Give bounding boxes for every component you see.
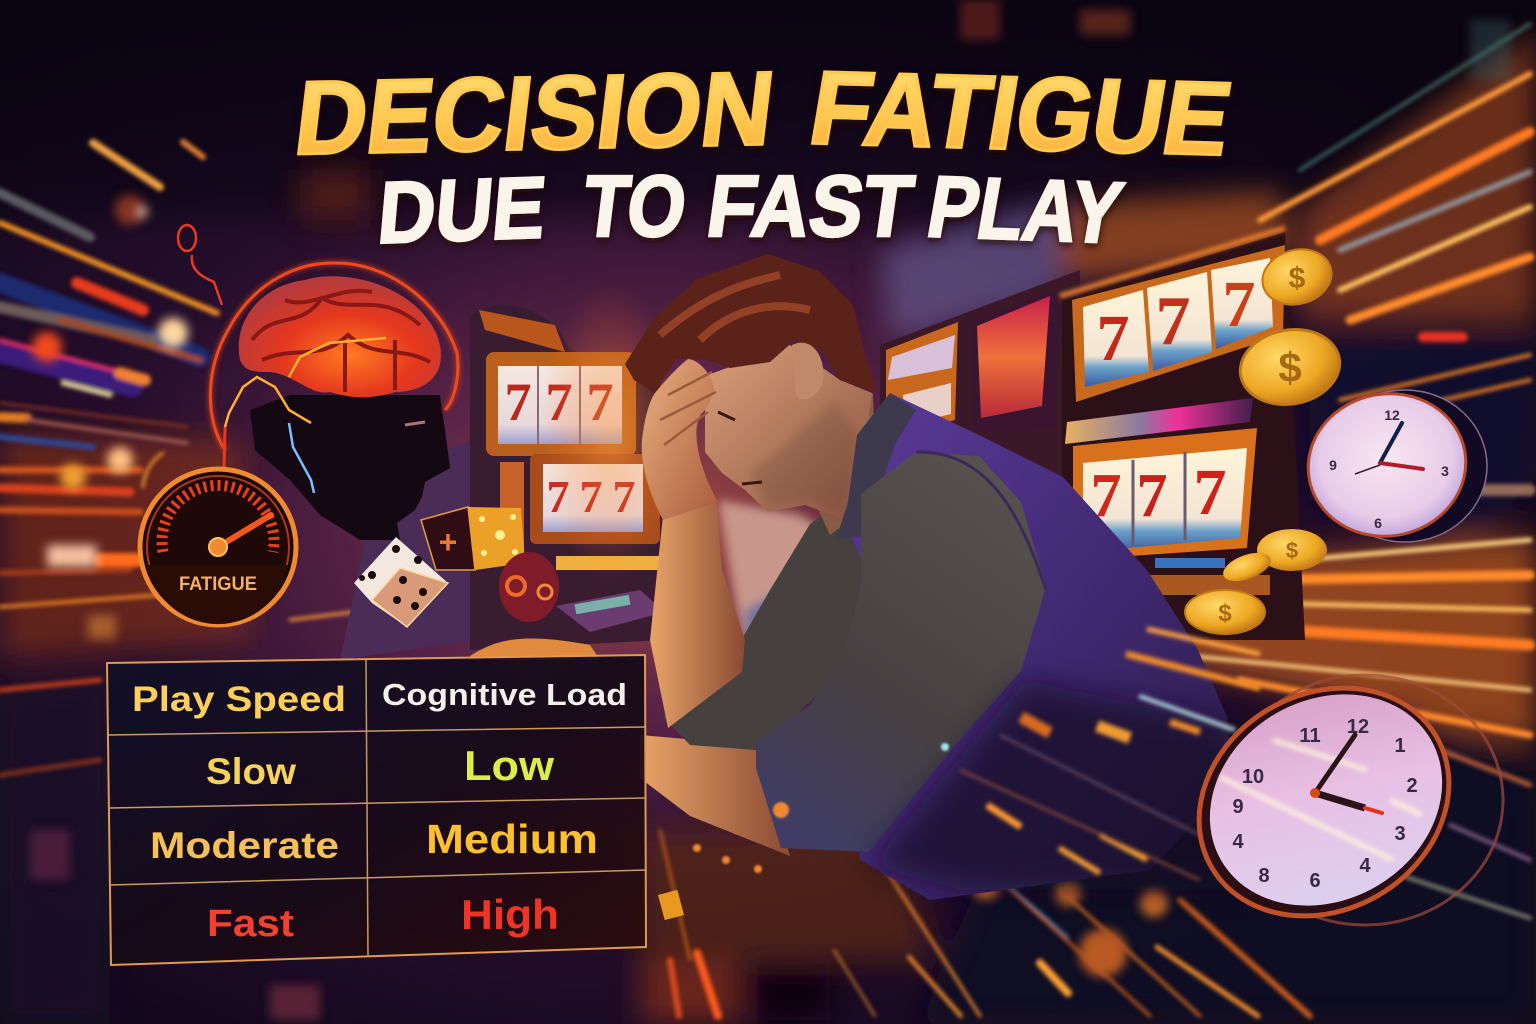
far slot machine [880,270,1080,560]
stubble shading [750,400,860,515]
row: fast: Fast [207,903,294,945]
orange die [421,507,475,570]
streaks over lower torso [693,629,1260,890]
white die [354,537,448,627]
table header: Play Speed [132,680,346,719]
coins [1185,242,1346,634]
coins: $ [1286,538,1298,563]
lower clock: 4 [1359,855,1371,877]
lower clock [1157,643,1503,961]
hair [625,254,878,393]
table header [132,677,627,719]
right and bottom streaks [660,24,1530,1016]
row: fast: High [461,891,559,938]
subtitle: PLAY [921,158,1130,262]
title: FATIGUE [802,50,1240,177]
upper reels [498,366,622,444]
lower clock: 12 [1347,716,1369,738]
blurred gap between arm and chest [718,500,840,660]
lower clock: 8 [1258,865,1270,887]
brain [239,276,441,397]
hand [642,359,718,520]
upper clock: 3 [1441,463,1449,479]
bottom reels [1083,448,1247,552]
upper clock: 9 [1329,457,1337,473]
red tokens [499,552,559,622]
fatigue gauge [140,469,296,625]
lower clock: 3 [1394,823,1406,845]
halo [210,263,458,450]
upper clock [1297,381,1487,549]
title: DECISION [289,50,780,177]
row: slow: Low [464,742,554,789]
coins: $ [1278,344,1302,391]
coins: $ [1218,600,1232,627]
face silhouette [250,395,450,540]
upper reels: 7 [586,372,614,432]
near sleeve [663,505,862,750]
top reels: 7 [1222,268,1256,341]
torso [830,393,1235,900]
neck [800,393,875,535]
top reels: 7 [1156,283,1190,360]
lower reels: 7 [580,471,602,522]
lower reels [543,464,643,532]
person [625,254,1235,900]
lower reels: 7 [612,471,636,522]
left streaks [0,142,370,775]
lower clock: 2 [1406,775,1418,797]
right slot machine [1040,228,1305,640]
bottom reels: 7 [1090,462,1122,530]
coins: $ [1289,262,1306,295]
row: slow [206,742,554,792]
face [705,345,872,520]
upper reels: 7 [504,372,532,432]
lower clock: 4 [1232,831,1244,853]
brain and silhouette [178,225,458,540]
orange block on surface [658,890,684,920]
comparison table [107,655,646,965]
eye and mouth [718,412,762,484]
top reels [1083,258,1273,387]
ear [792,343,823,399]
subtitle [374,157,1130,262]
balloon squiggle [178,225,222,305]
far sleeve [756,452,1046,852]
lower reels: 7 [546,471,570,522]
upper clock: 6 [1374,515,1382,531]
subtitle: TO [578,157,692,255]
left slot machine [340,305,666,660]
upper reels: 7 [546,372,572,432]
dice [354,507,559,627]
lightning [225,338,386,427]
bottom reels: 7 [1194,456,1226,529]
collar [836,393,916,540]
table forearm [640,735,790,856]
row: moderate [150,816,598,866]
lower clock: 11 [1299,725,1321,747]
lower clock: 6 [1309,870,1321,892]
dark table edge at bottom [752,968,830,1020]
dice: + [439,524,457,560]
central orange glow [540,280,680,580]
table header: Cognitive Load [382,677,627,712]
fatigue gauge: FATIGUE [179,574,257,595]
subtitle: DUE [374,158,550,262]
bottom reels: 7 [1136,462,1168,530]
row: moderate: Moderate [150,825,339,866]
row: moderate: Medium [426,816,598,862]
top reels: 7 [1096,302,1130,375]
raised forearm [650,498,745,728]
upper clock: 12 [1384,407,1400,423]
row: fast [207,891,559,945]
lower clock: 1 [1394,735,1406,757]
eye [405,422,425,425]
title [289,50,1240,262]
row: slow: Slow [206,751,296,792]
lower clock: 9 [1232,796,1244,818]
subtitle: FAST [701,157,919,255]
lower clock: 10 [1242,766,1264,788]
hands behind the table [470,639,600,660]
